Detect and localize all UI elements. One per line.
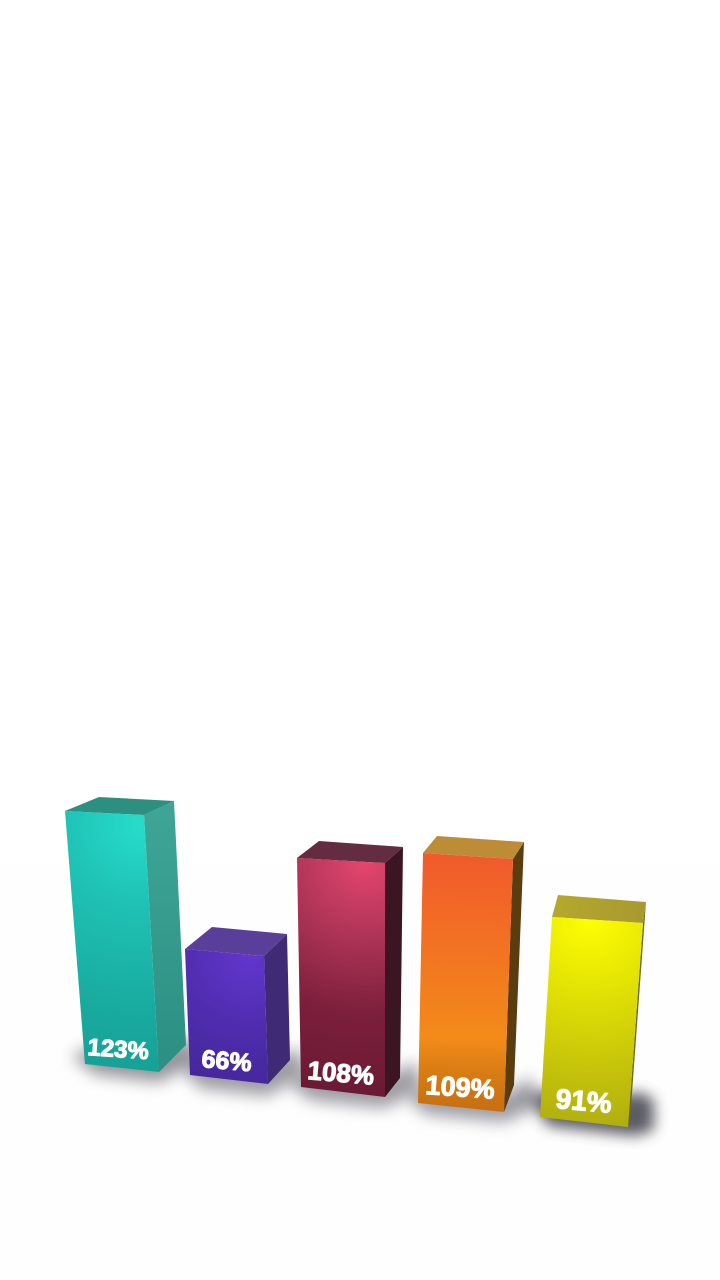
label: 91%: 91% [554, 1083, 613, 1119]
bar: 66% [185, 927, 290, 1084]
bar: 91% [540, 895, 646, 1127]
bar chart [65, 797, 654, 1136]
bar: 108% [297, 841, 403, 1097]
shadows under bars [72, 1036, 654, 1136]
label: 123%: 123% [87, 1034, 150, 1065]
bar: 123% [65, 797, 186, 1072]
label: 66%: 66% [200, 1045, 253, 1077]
bar: 109% [418, 836, 524, 1112]
label: 109%: 109% [425, 1070, 496, 1105]
label: 108%: 108% [306, 1055, 375, 1091]
